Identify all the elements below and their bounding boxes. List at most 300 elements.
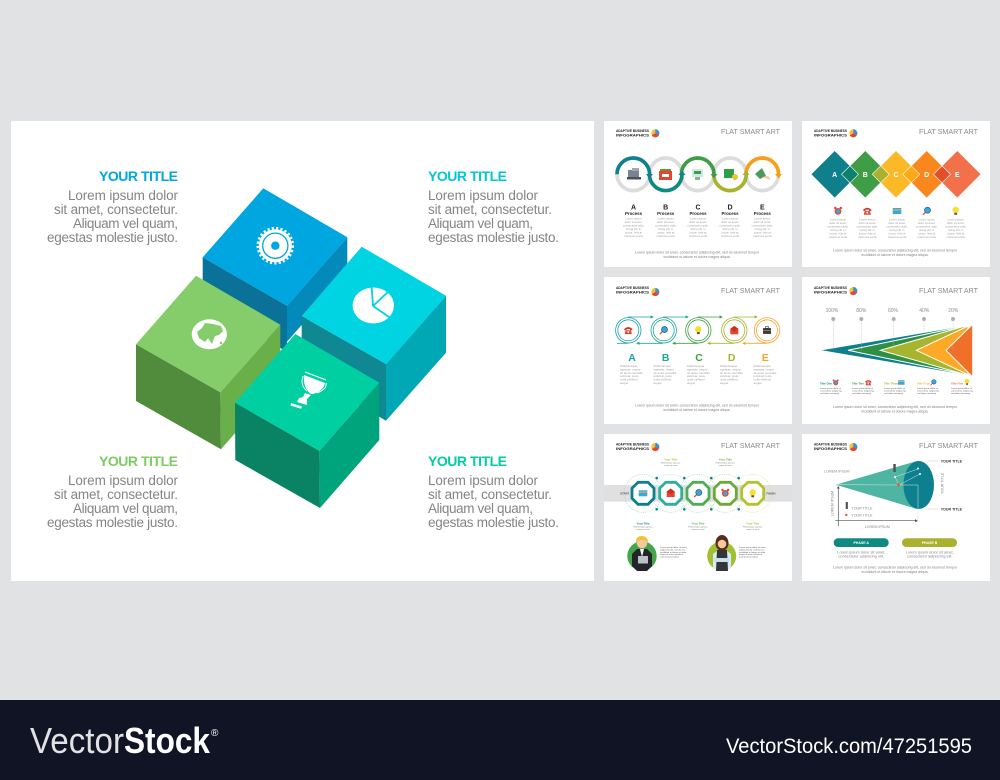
text block: top left: Lorem ipsum dolor <box>68 188 178 203</box>
text block: bottom right: YOUR TITLE <box>428 453 507 469</box>
text: ring descriptions: augue <box>720 381 729 385</box>
chart: percentage markers: 40% <box>919 308 930 314</box>
pill: phase B: PHASE B <box>922 541 938 545</box>
text: ring descriptions: augue <box>654 381 662 385</box>
labels: chart: LOREM IPSUM <box>830 491 834 516</box>
text: phase descriptions: Lorem ipsum dolor sit amet, <box>837 549 885 554</box>
labels: process columns: Process <box>625 211 643 216</box>
text: footer: incididunt ut labore et dolore magna aliqua. <box>862 253 929 257</box>
text: ring descriptions: pulvinar, justo <box>654 374 672 378</box>
text: legend descriptions: sed diam nonummy <box>884 393 904 395</box>
header <box>814 441 978 451</box>
logo: VectorStock: ® <box>211 728 219 739</box>
labels: step titles: Your Title <box>636 522 650 526</box>
icon: magnifier <box>660 326 668 334</box>
text: diamond descriptions: luctus, felis at <box>947 232 964 236</box>
text: ring descriptions: augue <box>620 381 629 385</box>
text: diamond descriptions: iscing elit, in <box>919 228 935 232</box>
text: process descriptions: maximus porta <box>624 234 643 238</box>
text: process descriptions: consectetur adip. <box>687 224 709 228</box>
labels: process columns: Process <box>689 211 707 216</box>
text: ring descriptions: pulvinar, justo <box>620 374 639 378</box>
text block: top left <box>47 168 178 245</box>
text: legend descriptions <box>820 387 973 395</box>
header <box>814 127 978 138</box>
panel: ring arrows slide <box>604 277 792 424</box>
icon: card <box>893 208 901 214</box>
chart: cone <box>836 461 934 520</box>
text: diamond descriptions: dolor sit amet, <box>859 221 876 225</box>
text: legend descriptions: sed diam nonummy <box>852 393 872 395</box>
text: legend descriptions: consectetur adipiscing <box>820 390 842 393</box>
panel: diamonds slide <box>802 121 990 267</box>
text: diamond descriptions: Lorem ipsum <box>830 218 847 222</box>
text: ring descriptions: egestas, neque <box>754 367 774 371</box>
text: legend descriptions: Lorem ipsum dolor sit <box>951 387 972 390</box>
chart: overlapping diamonds: A <box>832 172 837 179</box>
text: process descriptions: maximus porta <box>721 234 740 238</box>
text block: top right: Lorem ipsum dolor <box>428 188 538 203</box>
text: footer <box>635 404 760 412</box>
text block: top right: sit amet, consectetur. <box>428 202 552 217</box>
header: INFOGRAPHICS <box>814 290 847 294</box>
text block: bottom left: sit amet, consectetur. <box>54 487 178 502</box>
text: footer: Lorem ipsum dolor sit amet, consectetur adipiscing elit, sed do eiusmod tempor <box>833 249 958 253</box>
chart: dashed circles <box>624 474 772 512</box>
icon: globe <box>192 319 227 349</box>
legend: titles: Title Two <box>852 382 864 386</box>
header: INFOGRAPHICS <box>616 446 649 451</box>
text: diamond descriptions: consectetur adip. <box>916 224 938 228</box>
labels: letters: D <box>728 352 736 364</box>
text: legend descriptions: consectetur adipiscing <box>951 390 973 393</box>
labels: process columns: B <box>663 204 668 212</box>
text: step captions: neque sit amet <box>719 464 732 467</box>
text block: bottom right: Lorem ipsum dolor <box>428 473 538 488</box>
labels: step titles: Your Title <box>746 522 760 526</box>
labels: process columns: A <box>631 204 636 212</box>
labels: bold titles: YOUR TITLE <box>941 459 963 463</box>
text: ring descriptions: sit amet convallis <box>620 371 643 375</box>
text: ring descriptions: Pellentesque <box>620 364 638 368</box>
text: diamond descriptions <box>827 218 967 239</box>
text: process descriptions: iscing elit, in <box>690 227 706 231</box>
text: process descriptions: maximus porta <box>753 234 772 238</box>
labels: step titles: Your Title <box>691 522 705 526</box>
icon: magnifier <box>923 207 930 215</box>
text: process descriptions: consectetur adip. <box>752 224 773 228</box>
text: step captions: Pellentesque egestas, <box>661 462 681 465</box>
icon: briefcase <box>763 327 771 334</box>
icon: cash in hand <box>755 168 771 180</box>
text: process descriptions: consectetur adip. <box>623 224 644 228</box>
icon: money <box>724 169 738 180</box>
icon: magnifier <box>930 380 936 385</box>
icon: mail <box>667 488 675 497</box>
text: phase descriptions: Lorem ipsum dolor sit amet, <box>906 549 954 554</box>
icon: card <box>898 380 905 385</box>
text: ring descriptions: pulvinar, justo <box>687 374 706 378</box>
text: footer: incididunt ut labore et dolore magna aliqua. <box>862 409 929 413</box>
header <box>814 285 978 295</box>
header: ADAPTIVE BUSINESS <box>616 442 649 446</box>
text: diamond descriptions: iscing elit, in <box>830 228 846 232</box>
text: step captions: neque sit amet <box>746 528 760 531</box>
text: footer: incididunt ut labore et dolore magna aliqua. <box>862 570 929 574</box>
text: footer <box>833 405 958 413</box>
text: diamond descriptions: dolor sit amet, <box>918 221 936 225</box>
header: FLAT SMART ART <box>919 286 978 295</box>
text: step captions <box>633 462 763 531</box>
text: legend descriptions: sed diam nonummy <box>917 393 937 395</box>
text: footer: Lorem ipsum dolor sit amet, consectetur adipiscing elit, sed do eiusmod tempor <box>635 404 760 408</box>
footer bar <box>0 700 1000 780</box>
labels: process columns: E <box>760 204 765 212</box>
text block: top left: YOUR TITLE <box>99 168 178 184</box>
text: process descriptions: luctus, felis at <box>657 230 674 234</box>
labels: chart: LOREM IPSUM <box>865 525 890 529</box>
chart: percentage markers: 80% <box>856 308 867 314</box>
legend: markers <box>845 502 848 516</box>
header: ADAPTIVE BUSINESS <box>814 128 847 133</box>
text: ring descriptions: nulla eleifend <box>687 378 705 382</box>
text: process descriptions: Lorem ipsum <box>690 216 707 220</box>
text block: bottom right <box>428 453 559 530</box>
logo: VectorStock: Vector <box>30 720 124 761</box>
header: FLAT SMART ART <box>721 441 780 450</box>
icon: phone <box>865 380 871 385</box>
person: woman <box>707 535 736 571</box>
icon: bulb <box>750 489 756 497</box>
chart: linked circles <box>617 158 782 191</box>
header <box>616 127 780 138</box>
text: legend descriptions: Lorem ipsum dolor sit <box>884 387 905 390</box>
text: man description: nostrud exercitation <box>660 556 680 559</box>
text: diamond descriptions: Lorem ipsum <box>919 218 935 222</box>
chart: axes <box>835 486 918 526</box>
text: ring descriptions: Pellentesque <box>654 364 671 368</box>
text: ring descriptions: augue <box>687 381 696 385</box>
header: FLAT SMART ART <box>721 127 780 136</box>
text: step captions: Pellentesque egestas, <box>743 526 763 529</box>
icon: card <box>639 490 647 496</box>
text: step captions: neque sit amet <box>664 464 678 467</box>
text block: top left: Aliquam vel quam, <box>73 216 178 231</box>
labels: process columns: C <box>695 204 701 212</box>
text: process descriptions: luctus, felis at <box>722 230 739 234</box>
text: ring descriptions: pulvinar, justo <box>720 374 739 378</box>
text: process descriptions: dolor sit amet, <box>657 220 675 224</box>
text: diamond descriptions: maximus porta <box>888 235 907 239</box>
text: process descriptions: iscing elit, in <box>755 227 770 231</box>
text: legend descriptions: consectetur adipiscing <box>852 390 874 393</box>
text: process descriptions <box>623 216 773 238</box>
text: woman description: nostrud exercitation <box>739 556 759 559</box>
pill: phase B <box>902 538 957 547</box>
text: ring descriptions: Pellentesque <box>754 364 771 368</box>
labels: letters: E <box>762 352 769 364</box>
labels: chart: YOUR TITLE <box>851 513 873 517</box>
text: ring descriptions <box>620 364 777 385</box>
text: ring descriptions: sit amet convallis <box>687 371 710 375</box>
labels: letters: C <box>695 352 703 364</box>
text: footer: incididunt ut labore et dolore magna aliqua. <box>664 408 731 412</box>
labels: process columns <box>625 204 771 216</box>
legend: titles: Title Three <box>884 382 899 386</box>
text: process descriptions: Lorem ipsum <box>722 216 739 220</box>
text: ring descriptions: nulla eleifend <box>654 378 672 382</box>
legend: titles: Title One <box>820 382 832 386</box>
pill: phase A <box>834 538 889 547</box>
text block: bottom left <box>47 453 178 530</box>
labels: start and finish: START <box>620 492 630 496</box>
legend: titles: Title Four <box>917 382 931 386</box>
text: woman description: incididunt ut labore et dolor <box>739 551 766 554</box>
text: phase descriptions: consectetur adipiscing elit. <box>838 554 884 559</box>
text block: top right <box>428 168 559 245</box>
icon: atm <box>692 169 703 180</box>
text: footer <box>833 249 958 257</box>
header: FLAT SMART ART <box>919 127 978 136</box>
text: man description: Lorem ipsum dolor sit amet, <box>660 546 687 549</box>
chart: octagons <box>632 482 764 504</box>
icon: trophy <box>290 372 326 409</box>
text: ring descriptions: nulla eleifend <box>620 378 638 382</box>
legend: titles: Title Five <box>951 382 964 386</box>
labels: process columns: Process <box>754 211 771 216</box>
header: INFOGRAPHICS <box>616 132 649 138</box>
text block: bottom left: YOUR TITLE <box>99 453 178 469</box>
text: diamond descriptions: Lorem ipsum <box>889 218 906 222</box>
header: ADAPTIVE BUSINESS <box>814 285 847 290</box>
text: ring descriptions: sit amet convallis <box>754 371 777 375</box>
labels: step titles: Your Title <box>719 458 732 462</box>
text: process descriptions: Lorem ipsum <box>625 216 642 220</box>
icon: phone <box>863 208 871 215</box>
text: ring descriptions: egestas, neque <box>720 367 741 371</box>
text: phase descriptions: consectetur adipiscing elit. <box>907 554 953 559</box>
labels: step titles: Your Title <box>664 458 678 462</box>
text block: top left: sit amet, consectetur. <box>54 202 178 217</box>
text: woman description: adipiscing elit, sed do eius <box>739 548 765 551</box>
labels: bold titles <box>941 459 963 511</box>
header <box>616 441 780 451</box>
text: ring descriptions: augue <box>754 381 762 385</box>
text: diamond descriptions: iscing elit, in <box>948 228 964 232</box>
text: diamond descriptions: consectetur adip. <box>827 224 849 228</box>
header: INFOGRAPHICS <box>814 132 847 138</box>
text: legend descriptions: consectetur adipiscing <box>884 390 906 393</box>
text: process descriptions: luctus, felis at <box>754 230 771 234</box>
text: ring descriptions: egestas, neque <box>620 367 641 371</box>
text: phase descriptions <box>837 549 954 559</box>
icon: alarm clock <box>833 379 839 385</box>
text block: bottom right: Aliquam vel quam, <box>428 501 533 516</box>
icon: pie chart <box>353 285 394 324</box>
text: legend descriptions: Lorem ipsum dolor sit <box>820 387 841 390</box>
text: man description: aliqua ut enim ad minim <box>660 553 683 556</box>
text: diamond descriptions: luctus, felis at <box>889 232 906 236</box>
chart: percentage markers: 20% <box>948 308 959 314</box>
pill: phase A: PHASE A <box>853 541 869 545</box>
text: diamond descriptions: maximus porta <box>918 235 936 239</box>
text: process descriptions: Lorem ipsum <box>754 216 771 220</box>
text: diamond descriptions: Lorem ipsum <box>948 218 964 222</box>
text: process descriptions: iscing elit, in <box>722 227 738 231</box>
logo: VectorStock <box>30 720 219 761</box>
text: woman description <box>739 546 766 559</box>
person: man with tablet <box>627 536 657 571</box>
labels: step titles <box>636 458 760 526</box>
panel: circular process slide <box>604 121 792 267</box>
text: image id: VectorStock.com/47251595 <box>726 735 972 758</box>
header: FLAT SMART ART <box>919 441 978 450</box>
text: man description: incididunt ut labore et dolor <box>660 551 687 554</box>
chart: overlapping diamonds: D <box>924 172 929 179</box>
chart: overlapping diamonds: C <box>893 172 899 179</box>
labels: process columns: Process <box>657 211 675 216</box>
header: ADAPTIVE BUSINESS <box>616 285 649 290</box>
text: diamond descriptions: maximus porta <box>829 235 848 239</box>
cube: blue gear <box>203 188 347 352</box>
icon: magnifier <box>694 490 702 497</box>
text: step captions: Pellentesque egestas, <box>633 526 653 529</box>
icon: mail <box>730 326 738 334</box>
chart: concentric rings with arrows <box>616 316 780 344</box>
panel: cone chart slide <box>802 434 990 581</box>
text: process descriptions: Lorem ipsum <box>658 216 674 220</box>
header: FLAT SMART ART <box>721 286 780 295</box>
text block: bottom right: egestas molestie justo. <box>428 515 559 530</box>
chart: percentage markers: 60% <box>888 308 899 314</box>
text: process descriptions: iscing elit, in <box>626 227 642 231</box>
text: ring descriptions: pulvinar, justo <box>754 374 772 378</box>
cube: cyan pie chart <box>302 247 446 421</box>
labels: letters <box>628 352 769 364</box>
text: footer <box>635 251 760 259</box>
text: ring descriptions: sit amet convallis <box>654 371 677 375</box>
text: diamond descriptions: iscing elit, in <box>889 228 905 232</box>
header <box>616 285 780 296</box>
text: ring descriptions: Pellentesque <box>687 364 705 368</box>
text: diamond descriptions: maximus porta <box>858 235 877 239</box>
text: diamond descriptions: consectetur adip. <box>857 224 878 228</box>
text block: top right: YOUR TITLE <box>428 168 507 184</box>
header: ADAPTIVE BUSINESS <box>616 128 649 133</box>
text block: bottom left: Lorem ipsum dolor <box>68 473 178 488</box>
labels: letters: B <box>662 352 670 364</box>
text: diamond descriptions: luctus, felis at <box>918 232 935 236</box>
header: INFOGRAPHICS <box>616 290 649 294</box>
text: ring descriptions: egestas, neque <box>654 367 674 371</box>
cube: teal trophy <box>235 334 379 508</box>
text: diamond descriptions: dolor sit amet, <box>888 221 906 225</box>
header: INFOGRAPHICS <box>814 446 847 451</box>
text: process descriptions: luctus, felis at <box>690 230 707 234</box>
text block: bottom left: egestas molestie justo. <box>47 515 178 530</box>
icon: bulb <box>965 379 969 385</box>
text block: top right: Aliquam vel quam, <box>428 216 533 231</box>
text: step captions: neque sit amet <box>691 528 705 531</box>
text: man description: adipiscing elit, sed do eius <box>660 548 686 551</box>
panel: octagon timeline slide <box>604 434 792 581</box>
text: footer: Lorem ipsum dolor sit amet, consectetur adipiscing elit, sed do eiusmod tempor <box>833 566 958 570</box>
text: legend descriptions: consectetur adipiscing <box>917 390 939 393</box>
text: diamond descriptions: dolor sit amet, <box>947 221 965 225</box>
text: step captions: neque sit amet <box>636 528 650 531</box>
text: ring descriptions: nulla eleifend <box>754 378 772 382</box>
panel: main isometric cubes slide <box>11 121 594 581</box>
text: process descriptions: maximus porta <box>657 234 675 238</box>
text: ring descriptions: egestas, neque <box>687 367 708 371</box>
text: diamond descriptions: Lorem ipsum <box>859 218 876 222</box>
text: footer: Lorem ipsum dolor sit amet, consectetur adipiscing elit, sed do eiusmod tempor <box>635 251 760 255</box>
text: process descriptions: dolor sit amet, <box>625 220 642 224</box>
text: process descriptions: consectetur adip. <box>719 224 741 228</box>
chart: title leader lines <box>928 461 938 509</box>
icon: phone <box>624 327 632 334</box>
text: footer: incididunt ut labore et dolore magna aliqua. <box>664 255 731 259</box>
cube: green globe <box>136 276 280 449</box>
icon: bulb <box>952 207 959 215</box>
text: step captions: Pellentesque egestas, <box>715 462 736 465</box>
text: process descriptions: consectetur adip. <box>655 224 677 228</box>
icon: shop <box>659 169 672 180</box>
band: timeline <box>604 485 792 502</box>
text: woman description: Lorem ipsum dolor sit amet, <box>739 546 766 549</box>
text: diamond descriptions: consectetur adip. <box>945 224 967 228</box>
text: diamond descriptions: luctus, felis at <box>859 232 876 236</box>
chart: percentage markers <box>826 308 959 350</box>
chart: nested arrow triangles <box>819 324 973 377</box>
labels: start and finish <box>620 492 776 496</box>
text: man description <box>660 546 687 559</box>
labels: letters: A <box>628 352 636 364</box>
text: legend descriptions: Lorem ipsum dolor sit <box>917 387 938 390</box>
text block: bottom right: sit amet, consectetur. <box>428 487 552 502</box>
text: legend descriptions: Lorem ipsum dolor sit <box>852 387 873 390</box>
labels: bold titles: YOUR TITLE <box>941 507 963 511</box>
text: process descriptions: dolor sit amet, <box>689 220 707 224</box>
text: process descriptions: dolor sit amet, <box>721 220 739 224</box>
text: woman description: aliqua ut enim ad minim <box>739 553 762 556</box>
labels: chart: YOUR TITLE <box>851 507 873 511</box>
chart: overlapping diamonds: E <box>955 172 960 179</box>
text: diamond descriptions: consectetur adip. <box>886 224 908 228</box>
labels: chart: YOUR TITLE <box>940 472 944 494</box>
labels: process columns: Process <box>721 211 739 216</box>
icon: gear <box>258 228 293 263</box>
text: diamond descriptions: dolor sit amet, <box>829 221 847 225</box>
text: process descriptions: dolor sit amet, <box>754 220 771 224</box>
text: process descriptions: luctus, felis at <box>625 230 642 234</box>
text: diamond descriptions: luctus, felis at <box>830 232 847 236</box>
text: process descriptions: iscing elit, in <box>658 227 674 231</box>
text: ring descriptions: nulla eleifend <box>720 378 738 382</box>
text block: bottom left: Aliquam vel quam, <box>73 501 178 516</box>
labels: chart: LOREM IPSUM <box>824 470 849 474</box>
chart: connector dots <box>655 477 740 511</box>
labels: start and finish: FINISH <box>766 492 776 496</box>
text: footer <box>833 566 958 574</box>
icon: cash register <box>627 168 641 180</box>
text: ring descriptions: sit amet convallis <box>720 371 743 375</box>
labels: chart <box>824 470 944 529</box>
text: process descriptions: maximus porta <box>689 234 708 238</box>
labels: process columns: D <box>727 204 733 212</box>
logo: VectorStock: Stock <box>124 720 211 761</box>
header: ADAPTIVE BUSINESS <box>814 442 847 446</box>
